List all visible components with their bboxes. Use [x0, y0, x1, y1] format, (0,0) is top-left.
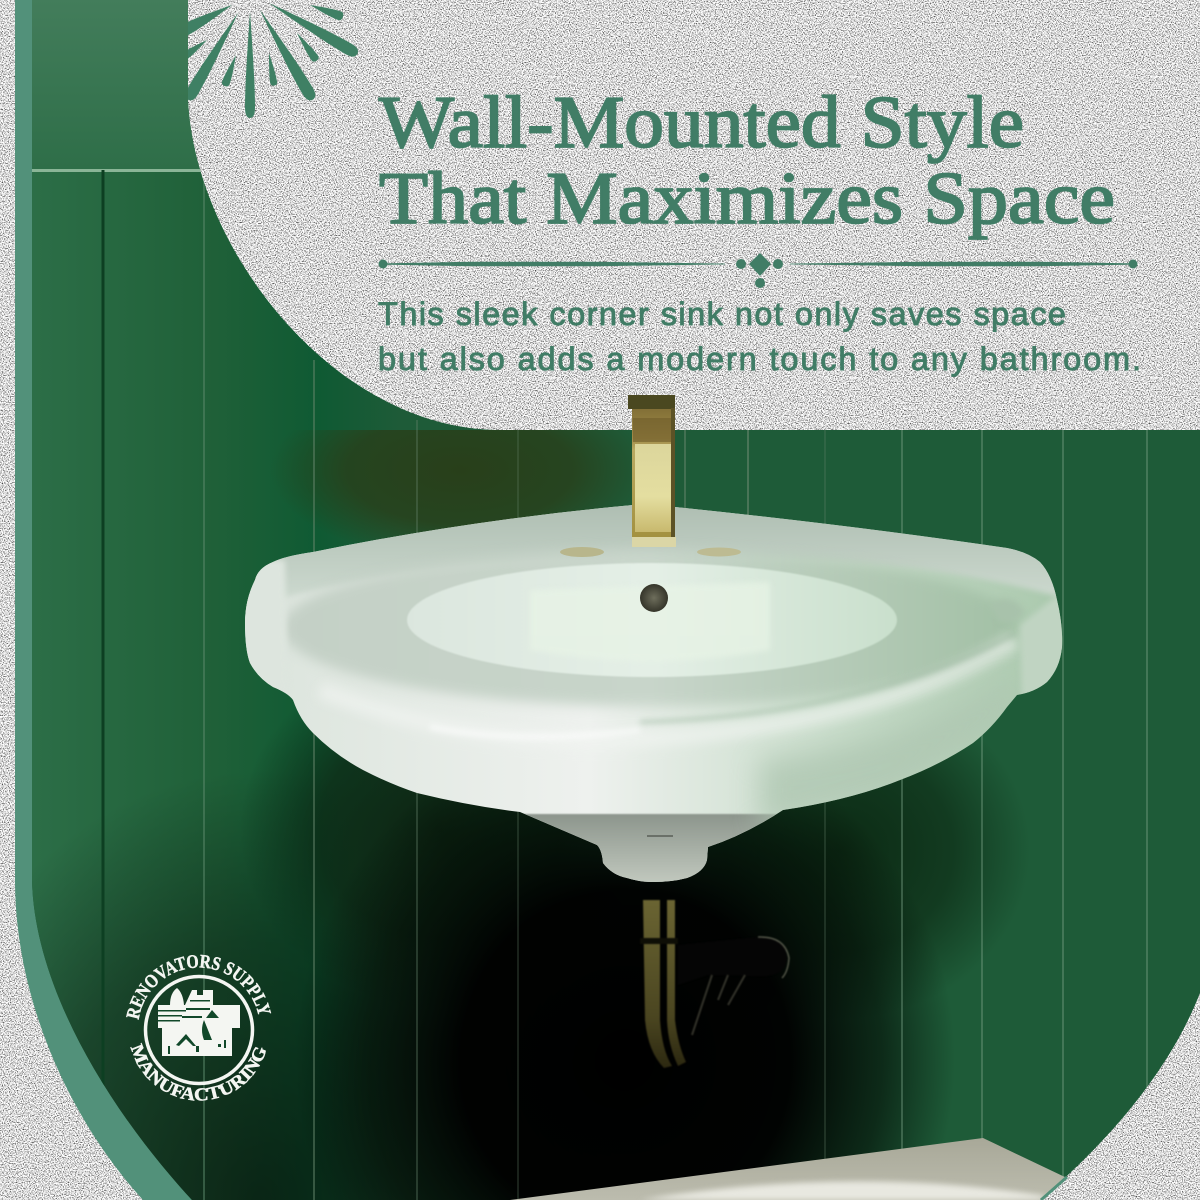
corner sink body [240, 500, 1070, 890]
icon: starburst [177, 0, 360, 118]
title: Wall-Mounted Style [379, 82, 1024, 164]
overflow drain [640, 584, 668, 612]
faucet [628, 395, 676, 547]
drain pipe [640, 900, 789, 1068]
right ear scroll [1006, 602, 1019, 612]
logo top curved text [139, 968, 259, 1020]
bathtub rim [510, 1138, 1067, 1200]
upper wall band [32, 0, 200, 169]
faucet body [632, 405, 675, 537]
subtitle: This sleek corner sink not only saves space [378, 296, 1066, 332]
green border band [15, 0, 200, 1200]
logo house [158, 988, 240, 1056]
logo wordmark: RENOVATORS SUPPLY [126, 954, 272, 1020]
rim trough [282, 550, 1018, 706]
subtitle: but also adds a modern touch to any bathroom. [378, 341, 1141, 377]
subtitle [378, 296, 1141, 377]
logo wordmark: MANUFACTURING [130, 1042, 266, 1101]
title: That Maximizes Space [379, 158, 1115, 240]
left side ear [240, 560, 288, 695]
ornamental divider [378, 253, 1138, 288]
front rim highlights [320, 640, 1015, 740]
lower rim shade [750, 694, 1018, 824]
left wall shading [32, 170, 400, 1200]
deck plug left [560, 547, 604, 557]
deck plug right [697, 548, 741, 556]
logo wordmark [126, 954, 272, 1101]
wall panel seams [32, 170, 1147, 1200]
faucet base [632, 537, 676, 547]
basin highlight [714, 584, 769, 652]
faucet dark band [633, 418, 673, 442]
faucet pale face [635, 444, 671, 532]
sink base fill [240, 500, 1070, 890]
faucet top cap [628, 395, 675, 409]
lower left darkening [36, 814, 456, 1200]
logo bottom curved text path [131, 1047, 267, 1100]
underside of bowl [524, 813, 777, 882]
title [379, 82, 1115, 240]
faucet right edge [671, 408, 675, 538]
back deck [240, 500, 1070, 610]
tub lower bright area [640, 1181, 1046, 1200]
right side ear [1020, 596, 1062, 694]
logo ring [146, 976, 252, 1084]
mark on underside [647, 835, 673, 837]
shadow regions under sink [240, 430, 1030, 1200]
right thin green band [1041, 1177, 1067, 1200]
basin bowl [407, 563, 897, 677]
logo: Renovators Supply Manufacturing [126, 954, 272, 1101]
